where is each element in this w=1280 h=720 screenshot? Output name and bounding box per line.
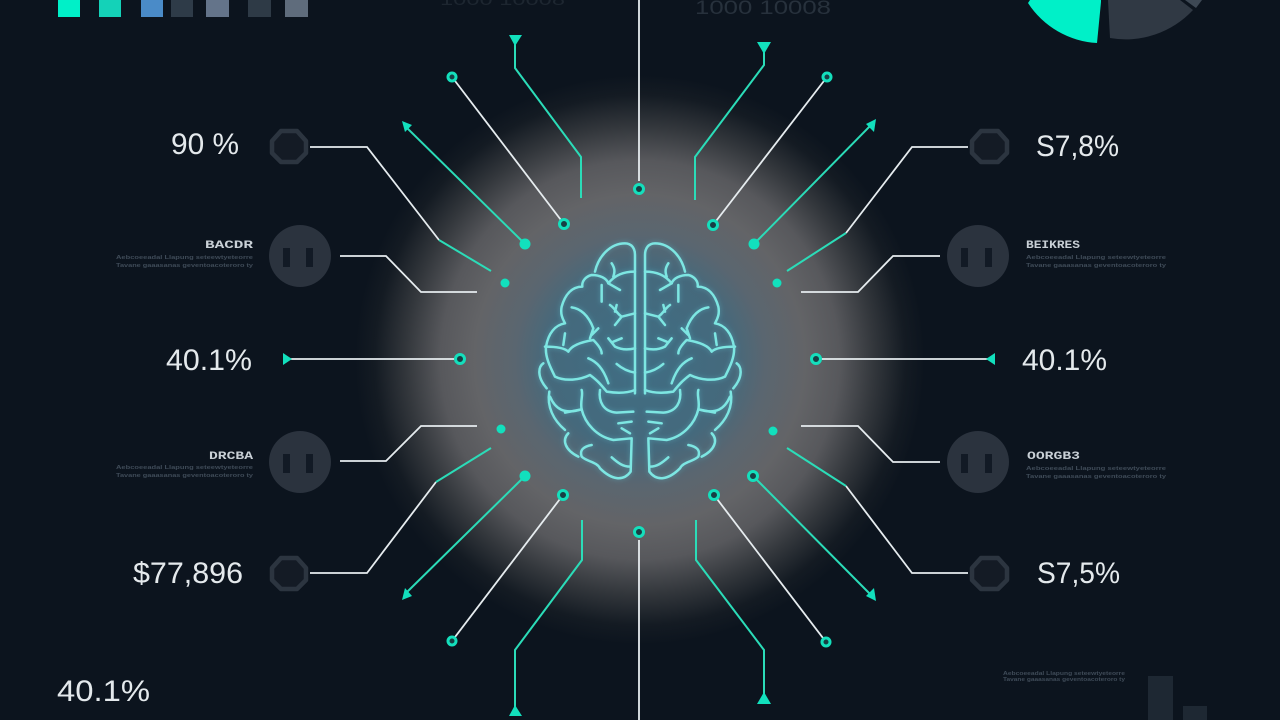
- connector: lower left diagonal teal: [402, 470, 530, 600]
- connector: bottom center: [634, 528, 644, 720]
- connector: upper left teal arrow: [509, 35, 581, 198]
- label block: upper left: BACDR: [205, 240, 254, 252]
- label block: upper left: Aebcoeeadal Llapung seteewtyeteorre: [116, 255, 253, 261]
- metric: top right: [772, 130, 1119, 288]
- label block: upper right: BEIKRES: [1026, 240, 1080, 252]
- label block: lower left: [116, 424, 506, 493]
- metric: middle left: 40.1%: [166, 344, 252, 377]
- label block: lower right: [768, 426, 1166, 493]
- metric: lower right: S7,5%: [1037, 557, 1120, 590]
- legend swatches: [58, 0, 308, 17]
- brain icon: [539, 243, 741, 478]
- label block: upper right: Tavane gaaasanas geventoacoteroro ty: [1026, 263, 1166, 269]
- connector: upper right white: [708, 73, 831, 230]
- connector: right diagonal teal: [748, 119, 876, 250]
- metric: lower left: $77,896: [133, 557, 243, 590]
- label block: lower left: Aebcoeeadal Llapung seteewtyeteorre: [116, 465, 253, 471]
- metric: 90 %: [171, 128, 510, 288]
- label block: lower left: DRCBA: [209, 451, 254, 463]
- central glow: [355, 75, 925, 645]
- bar chart: bottom right: [1148, 676, 1207, 720]
- footnote text: bottom right: [1003, 671, 1125, 683]
- connector: lower right teal arrow: [696, 520, 771, 704]
- label block: lower right: Aebcoeeadal Llapung seteewtyeteorre: [1026, 466, 1166, 472]
- connector: lower left white: [448, 490, 568, 645]
- metric: 90 %: 90 %: [171, 128, 239, 161]
- metric: top right: S7,8%: [1036, 130, 1119, 163]
- footnote text: bottom right: Aebcoeeadal Llapung seteewtyeteorre: [1003, 671, 1125, 677]
- connector: upper left white: [448, 73, 568, 228]
- metric: middle right: [812, 344, 1107, 377]
- footnote text: bottom right: Tavane gaaasanas geventoacoteroro ty: [1003, 677, 1125, 683]
- label block: lower right: Tavane gaaasanas geventoacoteroro ty: [1026, 474, 1166, 480]
- connector: left diagonal teal: [402, 121, 530, 250]
- metric: bottom left: 40.1%: [57, 675, 150, 708]
- connector: lower right diagonal teal: [748, 472, 876, 601]
- label block: upper left: Tavane gaaasanas geventoacoteroro ty: [116, 263, 253, 269]
- metric: lower right: [787, 448, 1120, 590]
- label block: upper left: [116, 225, 477, 292]
- metric: middle left: [166, 344, 464, 377]
- label block: upper right: [801, 225, 1166, 292]
- metric: lower left: [133, 448, 491, 590]
- connector: lower left teal arrow: [509, 520, 582, 716]
- connector: top center: [634, 0, 644, 194]
- connector: lower right white: [710, 490, 830, 646]
- label block: lower right: OORGB3: [1027, 451, 1081, 463]
- label block: upper right: Aebcoeeadal Llapung seteewtyeteorre: [1026, 255, 1166, 261]
- pie chart: [1028, 0, 1202, 43]
- metric: middle right: 40.1%: [1022, 344, 1107, 377]
- label block: lower left: Tavane gaaasanas geventoacoteroro ty: [116, 473, 253, 479]
- connector: upper right teal arrow: [695, 42, 771, 200]
